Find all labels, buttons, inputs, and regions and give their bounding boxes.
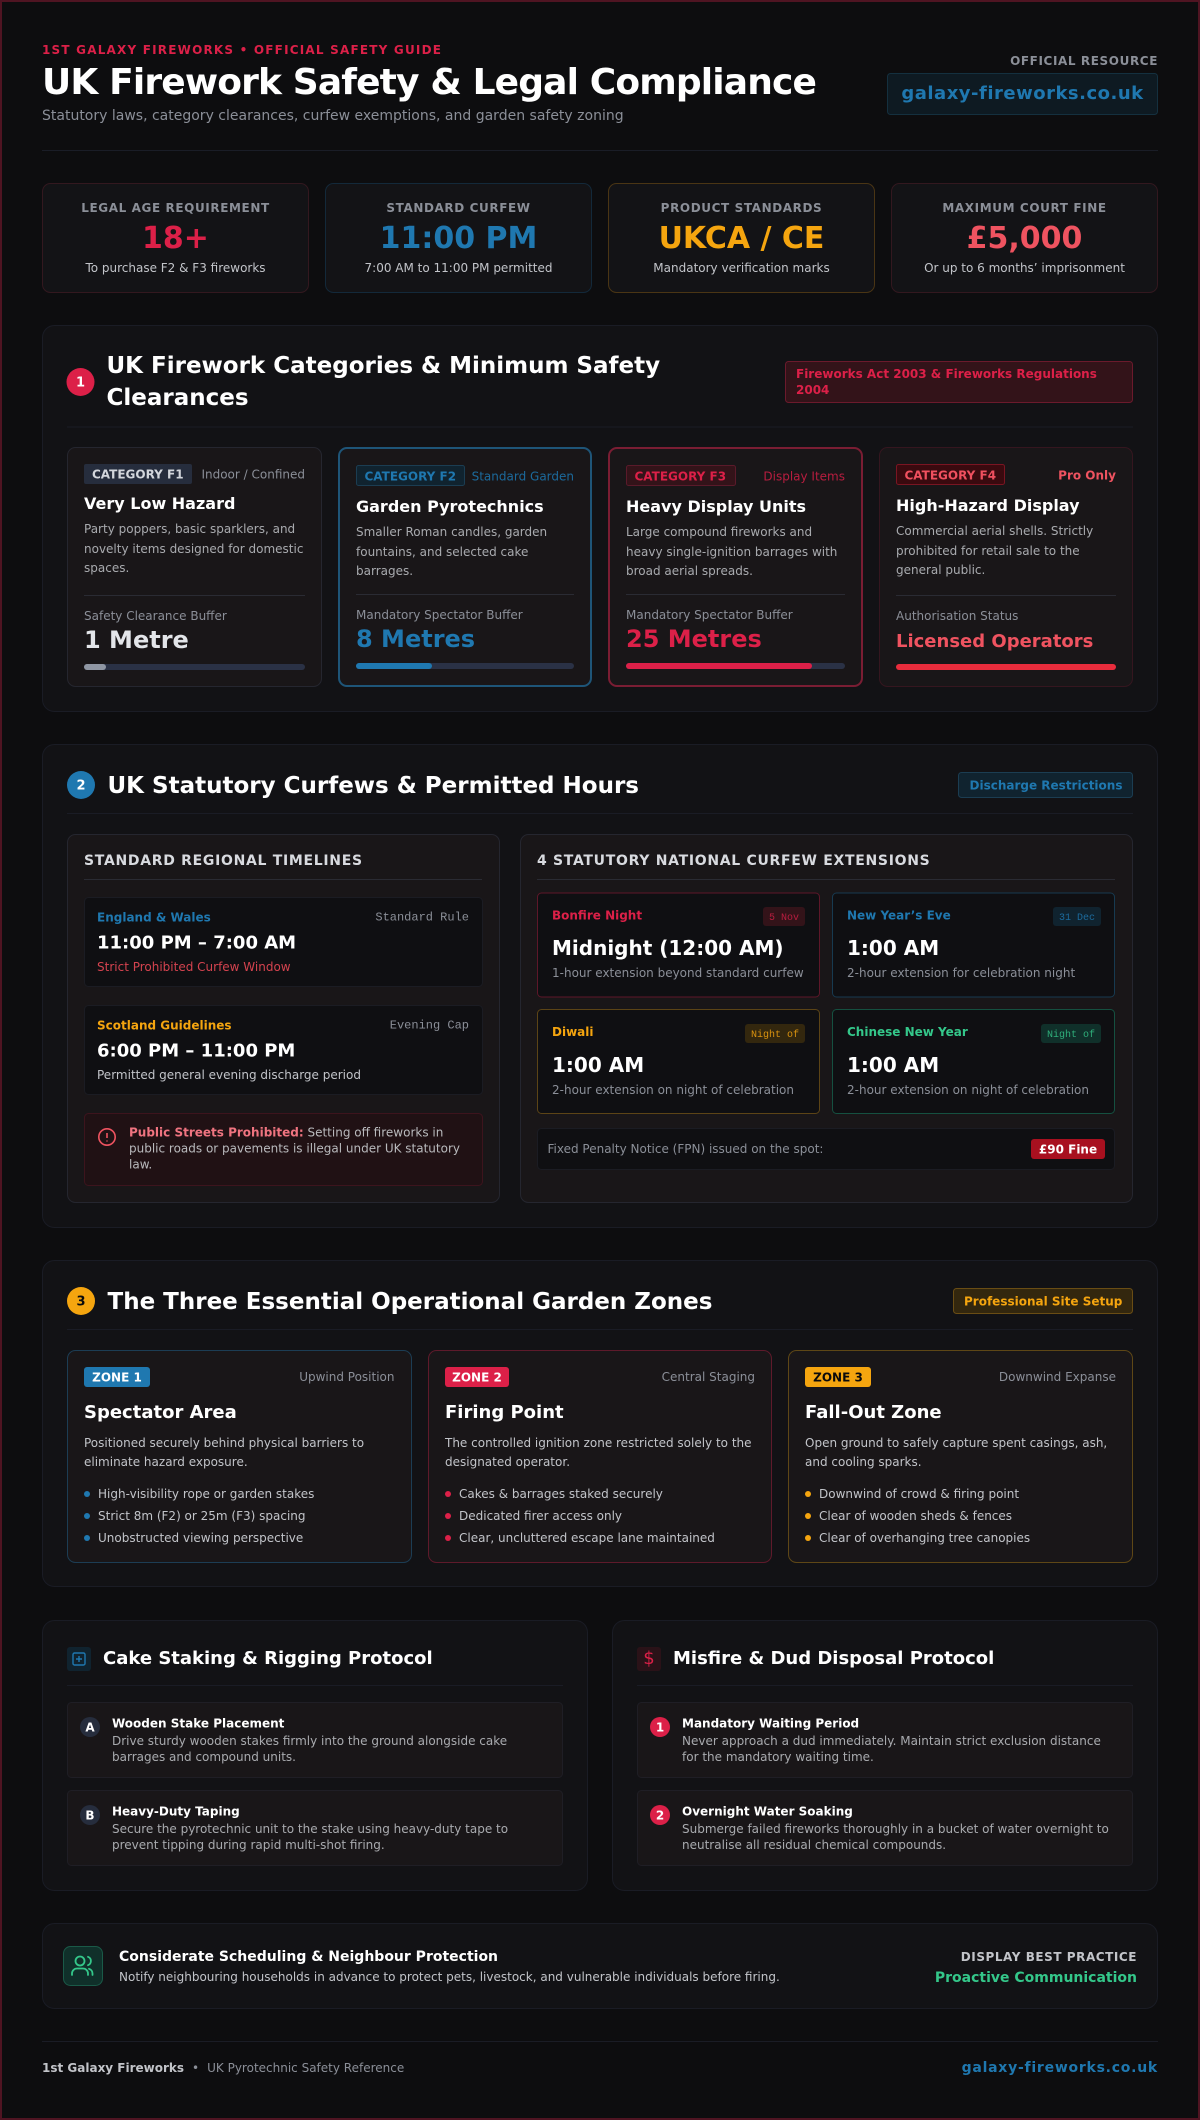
Scotland: Scotland Guidelines	[97, 1018, 232, 1032]
official resource link	[888, 54, 1158, 114]
step 1: for the mandatory waiting time.	[682, 1750, 874, 1764]
site setup tag: Professional Site Setup	[964, 1294, 1123, 1308]
extension: Diwali	[538, 1010, 820, 1114]
extension: New Year's Eve: New Year’s Eve	[847, 908, 951, 922]
panel: neighbour protection	[42, 1924, 1158, 2008]
card: F4: Pro Only	[1058, 468, 1116, 482]
best practice: DISPLAY BEST PRACTICE	[961, 1950, 1137, 1964]
header	[42, 43, 1158, 124]
card: zone 3: Downwind of crowd & firing point	[819, 1487, 1019, 1501]
discharge tag: Discharge Restrictions	[970, 778, 1122, 792]
extension: Diwali: Night of	[751, 1029, 799, 1041]
card: F3: heavy single-ignition barrages with	[626, 545, 837, 559]
card: zone 2: The controlled ignition zone restricted solely to the	[444, 1436, 752, 1450]
card: F2: Smaller Roman candles, garden	[356, 525, 547, 539]
card: F2: Mandatory Spectator Buffer	[356, 608, 523, 622]
England and Wales	[84, 898, 482, 986]
extension: Diwali: 1:00 AM	[552, 1053, 644, 1077]
best practice	[935, 1950, 1137, 1986]
card: zone 1: Strict 8m (F2) or 25m (F3) spacing	[98, 1509, 306, 1523]
step A: Wooden Stake Placement	[112, 1716, 285, 1730]
fixed penalty notice: Fixed Penalty Notice (FPN) issued on the spot:	[548, 1142, 823, 1156]
card: zone 3: and cooling sparks.	[805, 1455, 922, 1469]
card: F1: spaces.	[84, 561, 129, 575]
panel: section 3 zones	[42, 1260, 1158, 1586]
panel: curfew extensions	[520, 834, 1132, 1202]
discharge tag	[958, 772, 1132, 798]
step 2: 2	[656, 1808, 664, 1822]
legal tag: Fireworks Act 2003 & Fireworks Regulations	[796, 367, 1097, 381]
icon: plus square	[67, 1647, 91, 1671]
card: zone 3: Clear of wooden sheds & fences	[819, 1509, 1012, 1523]
stat: product standards: Mandatory verification marks	[653, 261, 830, 275]
card: F3: Large compound fireworks and	[626, 525, 812, 539]
extension: Chinese New Year: Night of	[1047, 1029, 1095, 1041]
callout: public streets	[84, 1114, 482, 1186]
step 2	[638, 1790, 1132, 1866]
panel: curfew extensions: 4 STATUTORY NATIONAL CURFEW EXTENSIONS	[537, 853, 930, 869]
fixed penalty notice	[538, 1128, 1114, 1170]
footer: galaxy-fireworks.co.uk	[962, 2060, 1158, 2076]
stat: product standards: PRODUCT STANDARDS	[661, 201, 822, 215]
card: zone 1: High-visibility rope or garden stakes	[98, 1487, 314, 1501]
extension: New Year's Eve	[832, 893, 1114, 997]
step 1: Mandatory Waiting Period	[682, 1716, 859, 1730]
step 1	[638, 1702, 1132, 1778]
card: F1	[68, 448, 322, 686]
card: F2: 8 Metres	[356, 625, 475, 653]
card: zone 1: Upwind Position	[299, 1370, 394, 1384]
official resource link: OFFICIAL RESOURCE	[1010, 54, 1158, 68]
stat: curfew	[326, 184, 592, 292]
section 3 number	[67, 1287, 95, 1315]
stat: fine	[892, 184, 1158, 292]
section 1 heading: Clearances	[106, 385, 249, 411]
card: F3	[609, 448, 862, 686]
icon: people	[64, 1946, 102, 1986]
card: F4: prohibited for retail sale to the	[896, 544, 1080, 558]
card: zone 2	[428, 1350, 772, 1562]
card: F1: Party poppers, basic sparklers, and	[84, 522, 295, 536]
callout: public streets: law.	[129, 1158, 152, 1172]
stat: fine: £5,000	[967, 221, 1082, 256]
card: F3: Mandatory Spectator Buffer	[626, 608, 793, 622]
card: zone 2: Dedicated firer access only	[459, 1509, 622, 1523]
card: zone 3: ZONE 3	[813, 1370, 863, 1384]
card: F4: Commercial aerial shells. Strictly	[896, 524, 1093, 538]
card: F1: CATEGORY F1	[92, 468, 184, 482]
card: F4: High-Hazard Display	[896, 496, 1080, 515]
card: F2: CATEGORY F2	[364, 470, 456, 484]
England and Wales: England & Wales	[97, 910, 211, 924]
card: zone 1: ZONE 1	[92, 1370, 142, 1384]
extension: Chinese New Year: Chinese New Year	[847, 1025, 968, 1039]
card: F4: CATEGORY F4	[904, 468, 996, 482]
panel: neighbour protection: Notify neighbouring households in advance to protect pets, livestock, and vulnerable individuals before firing.	[119, 1970, 780, 1984]
stat: curfew: 7:00 AM to 11:00 PM permitted	[365, 261, 552, 275]
extension: Chinese New Year: 2-hour extension on night of celebration	[847, 1083, 1089, 1097]
extension: Chinese New Year: 1:00 AM	[847, 1053, 939, 1077]
England and Wales: Standard Rule	[375, 910, 469, 924]
stat: product standards: UKCA / CE	[659, 221, 824, 256]
panel: cake staking	[42, 1620, 588, 1890]
card: F1: 1 Metre	[84, 626, 189, 654]
card: zone 2: designated operator.	[445, 1455, 570, 1469]
title: UK Firework Safety & Legal Compliance	[42, 62, 816, 103]
fixed penalty notice: £90 Fine	[1039, 1142, 1097, 1156]
extension: Bonfire Night: 5 Nov	[769, 913, 799, 924]
stat: legal age: LEGAL AGE REQUIREMENT	[81, 201, 270, 215]
card: zone 3: Fall-Out Zone	[805, 1402, 942, 1423]
official resource link: galaxy-fireworks.co.uk	[901, 83, 1144, 104]
card: F2: Standard Garden	[472, 470, 574, 484]
card: zone 1	[68, 1350, 412, 1562]
legal tag: 2004	[796, 383, 829, 397]
step B: prevent tipping during rapid multi-shot firing.	[112, 1838, 385, 1852]
card: zone 2: Firing Point	[445, 1402, 564, 1423]
step A	[68, 1702, 562, 1778]
stat cards	[42, 184, 1158, 292]
extension: Bonfire Night	[538, 893, 820, 997]
card: zone 3	[788, 1350, 1132, 1562]
panel: section 2 curfews	[42, 744, 1158, 1228]
card: F3: CATEGORY F3	[634, 470, 726, 484]
section 1 heading: UK Firework Categories & Minimum Safety	[106, 353, 660, 379]
icon: alert	[99, 1129, 115, 1145]
step 1: Never approach a dud immediately. Maintain strict exclusion distance	[682, 1734, 1101, 1748]
stat: legal age	[42, 184, 308, 292]
heading: cake staking: Cake Staking & Rigging Protocol	[103, 1648, 433, 1669]
Scotland	[84, 1006, 482, 1094]
icon: dollar	[637, 1647, 661, 1671]
callout: public streets: Public Streets Prohibited:	[129, 1126, 304, 1140]
card: F3: Heavy Display Units	[626, 497, 806, 516]
section 2 number	[67, 771, 95, 799]
panel: regional timelines	[68, 834, 500, 1202]
step A: barrages and compound units.	[112, 1750, 296, 1764]
step B: B	[85, 1808, 95, 1822]
extension: Bonfire Night: Bonfire Night	[552, 908, 642, 922]
panel: misfire disposal	[612, 1620, 1158, 1890]
card: zone 2: Clear, uncluttered escape lane maintained	[459, 1531, 715, 1545]
step 1: 1	[656, 1720, 664, 1734]
extension: New Year's Eve: 2-hour extension for celebration night	[847, 966, 1075, 980]
stat: fine: Or up to 6 months’ imprisonment	[924, 261, 1125, 275]
panel: regional timelines: STANDARD REGIONAL TIMELINES	[84, 853, 363, 869]
stat: legal age: 18+	[142, 221, 209, 256]
subtitle: Statutory laws, category clearances, curfew exemptions, and garden safety zoning	[42, 108, 624, 124]
callout: public streets: Setting off fireworks in	[304, 1126, 443, 1140]
step B: Heavy-Duty Taping	[112, 1804, 240, 1818]
card: zone 3: Clear of overhanging tree canopies	[819, 1531, 1030, 1545]
icon: dollar: $	[643, 1648, 655, 1669]
step 2: Overnight Water Soaking	[682, 1804, 853, 1818]
card: F1: Very Low Hazard	[84, 494, 235, 513]
extension: Diwali: 2-hour extension on night of celebration	[552, 1083, 794, 1097]
step 2: neutralise all residual chemical compounds.	[682, 1838, 946, 1852]
step B: Secure the pyrotechnic unit to the stake using heavy-duty tape to	[112, 1822, 508, 1836]
section 1 number	[66, 368, 94, 396]
extension: Diwali: Diwali	[552, 1025, 593, 1039]
card: zone 1: eliminate hazard exposure.	[84, 1455, 248, 1469]
Scotland: Evening Cap	[390, 1018, 469, 1032]
card: zone 1: Positioned securely behind physical barriers to	[84, 1436, 364, 1450]
step A: Drive sturdy wooden stakes firmly into the ground alongside cake	[112, 1734, 507, 1748]
card: zone 2: Central Staging	[662, 1370, 755, 1384]
card: F2: Garden Pyrotechnics	[356, 497, 544, 516]
callout text: Considerate Scheduling & Neighbour Protection	[119, 1949, 498, 1965]
card: F4: Authorisation Status	[896, 609, 1018, 623]
footer	[42, 2060, 1158, 2076]
callout: public streets: public roads or pavements is illegal under UK statutory	[129, 1142, 460, 1156]
card: F4: Licensed Operators	[896, 631, 1093, 652]
card: zone 2: ZONE 2	[452, 1370, 502, 1384]
card: zone 1: Spectator Area	[84, 1402, 237, 1423]
England and Wales: Strict Prohibited Curfew Window	[97, 960, 291, 974]
card: F3: 25 Metres	[626, 625, 762, 653]
section 3 number: 3	[76, 1294, 86, 1310]
section 1 number: 1	[76, 376, 85, 390]
section 2 heading: UK Statutory Curfews & Permitted Hours	[108, 773, 639, 799]
section 2 number: 2	[76, 778, 86, 794]
card: zone 2: Cakes & barrages staked securely	[459, 1487, 663, 1501]
card: zone 3: Downwind Expanse	[999, 1370, 1116, 1384]
England and Wales: 11:00 PM – 7:00 AM	[97, 932, 296, 954]
step 2: Submerge failed fireworks thoroughly in a bucket of water overnight to	[682, 1822, 1109, 1836]
panel: section 1 categories	[42, 326, 1158, 712]
step A: A	[85, 1720, 95, 1734]
best practice: Proactive Communication	[935, 1970, 1137, 1986]
extension: New Year's Eve: 1:00 AM	[847, 936, 939, 960]
footer: 1st Galaxy Fireworks • UK Pyrotechnic Safety Reference	[42, 2061, 404, 2075]
legal tag	[786, 362, 1132, 402]
card: zone 3: Open ground to safely capture spent casings, ash,	[805, 1436, 1107, 1450]
card: F2: barrages.	[356, 564, 413, 578]
section 3 heading: The Three Essential Operational Garden Zones	[108, 1289, 712, 1315]
card: F1: Indoor / Confined	[201, 468, 305, 482]
Scotland: 6:00 PM – 11:00 PM	[97, 1040, 295, 1062]
extension: Chinese New Year	[832, 1010, 1114, 1114]
stat: legal age: To purchase F2 & F3 fireworks	[84, 261, 266, 275]
card: F4: general public.	[896, 563, 985, 577]
card: F1: novelty items designed for domestic	[84, 542, 303, 556]
card: F3: broad aerial spreads.	[626, 564, 753, 578]
card: F3: Display Items	[763, 470, 845, 484]
card: F4	[880, 448, 1132, 686]
Scotland: Permitted general evening discharge period	[97, 1068, 361, 1082]
stat: curfew: STANDARD CURFEW	[386, 201, 531, 215]
card: zone 1: Unobstructed viewing perspective	[98, 1531, 303, 1545]
card: F2	[339, 448, 591, 686]
stat: fine: MAXIMUM COURT FINE	[942, 201, 1107, 215]
card: F2: fountains, and selected cake	[356, 545, 528, 559]
step B	[68, 1790, 562, 1866]
card: F1: Safety Clearance Buffer	[84, 609, 227, 623]
stat: product standards	[608, 184, 874, 292]
extension: New Year's Eve: 31 Dec	[1059, 913, 1095, 924]
extension: Bonfire Night: 1-hour extension beyond standard curfew	[552, 966, 804, 980]
heading: misfire: Misfire & Dud Disposal Protocol	[673, 1648, 994, 1669]
stat: curfew: 11:00 PM	[380, 221, 537, 256]
extension: Bonfire Night: Midnight (12:00 AM)	[552, 936, 784, 960]
eyebrow: 1ST GALAXY FIREWORKS • OFFICIAL SAFETY GUIDE	[42, 43, 442, 57]
site setup tag	[954, 1288, 1132, 1314]
